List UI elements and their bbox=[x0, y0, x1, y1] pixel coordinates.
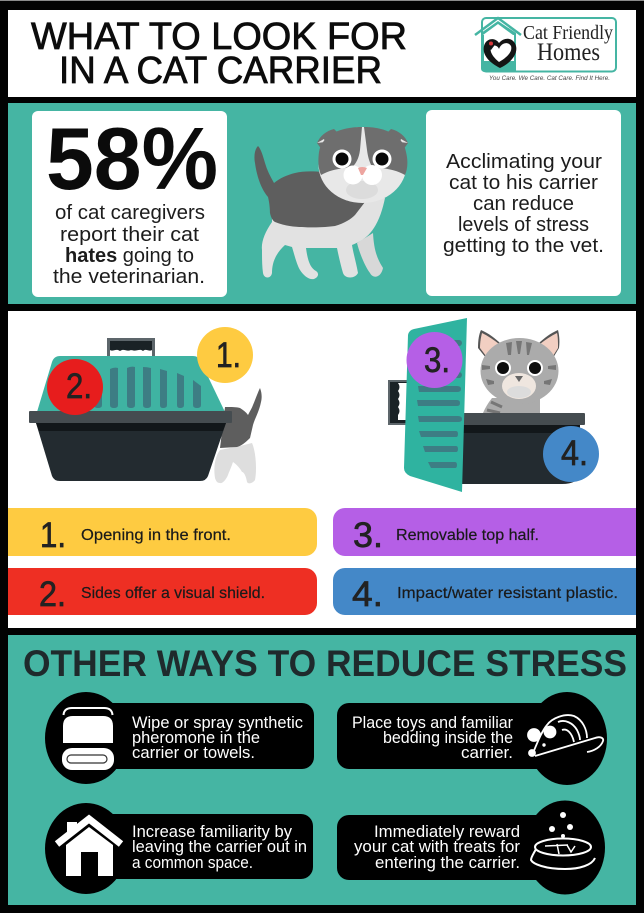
tip: treats: Immediately reward bbox=[374, 822, 520, 841]
feature 4 bbox=[333, 568, 636, 615]
card: 58 percent statistic bbox=[32, 109, 227, 297]
panel: carrier features bbox=[8, 311, 636, 628]
icon: towels bbox=[62, 708, 114, 770]
illustration: scottish fold cat bbox=[254, 127, 408, 279]
badge 3 bbox=[406, 332, 462, 388]
card: acclimating text: Acclimating your bbox=[446, 151, 602, 173]
title: IN A CAT CARRIER bbox=[59, 50, 382, 92]
badge 2: 2. bbox=[66, 367, 92, 406]
heading: OTHER WAYS TO REDUCE STRESS bbox=[23, 643, 627, 684]
carrier base bbox=[462, 425, 580, 484]
card: acclimating text bbox=[426, 110, 621, 296]
tip: familiarity: Increase familiarity by bbox=[132, 822, 292, 841]
logo: Cat Friendly Homes: You Care. We Care. Cat Care. Find It Here. bbox=[489, 76, 610, 82]
icon: toy mouse bbox=[528, 715, 603, 756]
feature 1: 1. bbox=[40, 516, 66, 555]
title: WHAT TO LOOK FOR bbox=[31, 16, 407, 58]
tip: pheromone: Wipe or spray synthetic bbox=[132, 713, 303, 732]
feature 4: Impact/water resistant plastic. bbox=[397, 585, 618, 602]
feature 2: 2. bbox=[39, 575, 66, 614]
tip: pheromone: carrier or towels. bbox=[132, 743, 255, 762]
feature 3: Removable top half. bbox=[396, 527, 539, 544]
badge 2 bbox=[47, 359, 103, 415]
tip: treats: entering the carrier. bbox=[375, 853, 520, 872]
tip: toys and bedding: Place toys and familiar bbox=[352, 713, 513, 732]
feature 3: 3. bbox=[353, 516, 383, 555]
tip: toys and bedding bbox=[337, 692, 607, 785]
feature 1 bbox=[8, 508, 317, 556]
card: 58 percent statistic: 58% bbox=[46, 109, 218, 208]
cat ears bbox=[317, 129, 340, 150]
card: 58 percent statistic: hates going to bbox=[65, 245, 194, 267]
cat behind carrier bbox=[214, 388, 262, 483]
logo: Cat Friendly Homes: Cat Friendly bbox=[523, 22, 613, 44]
tip: toys and bedding: carrier. bbox=[461, 743, 513, 762]
cat legs and lower body bbox=[262, 190, 385, 279]
card: acclimating text: can reduce bbox=[473, 193, 574, 215]
carrier rim and base bbox=[36, 423, 226, 481]
cat head bbox=[318, 127, 407, 203]
cat tail and back bbox=[254, 146, 365, 227]
icon: house bbox=[57, 819, 121, 876]
illustration: carrier with removable top and kitten bbox=[388, 318, 585, 492]
tip: pheromone bbox=[45, 692, 314, 784]
badge 1 bbox=[197, 327, 253, 383]
card: acclimating text: levels of stress bbox=[458, 214, 589, 236]
icon: treat bowl bbox=[531, 812, 595, 869]
card: 58 percent statistic: the veterinarian. bbox=[53, 266, 205, 288]
tip: treats: your cat with treats for bbox=[354, 837, 520, 856]
kitten bbox=[478, 330, 559, 413]
card: acclimating text: getting to the vet. bbox=[443, 235, 604, 257]
tip: pheromone: pheromone in the bbox=[132, 728, 260, 747]
tip: familiarity: a common space. bbox=[132, 853, 253, 872]
card: acclimating text: cat to his carrier bbox=[449, 172, 598, 194]
tip: toys and bedding: bedding inside the bbox=[383, 728, 513, 747]
panel: other ways to reduce stress bbox=[8, 635, 636, 905]
feature 3 bbox=[333, 508, 636, 556]
panel: statistics bbox=[8, 103, 636, 304]
badge 4 bbox=[543, 426, 599, 482]
card: 58 percent statistic: report their cat bbox=[60, 224, 199, 246]
feature 1: Opening in the front. bbox=[81, 527, 231, 544]
panel: header bbox=[8, 10, 636, 97]
card: 58 percent statistic: of cat caregivers bbox=[55, 202, 205, 224]
logo: Cat Friendly Homes: Homes bbox=[537, 39, 600, 66]
carrier door handle bbox=[388, 380, 408, 425]
tip: familiarity bbox=[45, 803, 313, 894]
tip: familiarity: leaving the carrier out in bbox=[132, 837, 307, 856]
carrier top half bbox=[404, 318, 467, 492]
illustration: front-opening carrier with cat bbox=[29, 338, 262, 483]
title bbox=[31, 16, 407, 92]
tip: treats bbox=[337, 800, 605, 894]
carrier lid bbox=[37, 356, 225, 412]
logo: Cat Friendly Homes bbox=[475, 18, 616, 82]
feature 4: 4. bbox=[352, 575, 383, 614]
carrier handle bbox=[107, 338, 155, 357]
badge 3: 3. bbox=[424, 341, 450, 380]
feature 2 bbox=[8, 568, 317, 615]
badge 4: 4. bbox=[561, 434, 588, 473]
feature 2: Sides offer a visual shield. bbox=[81, 585, 265, 602]
badge 1: 1. bbox=[216, 336, 241, 375]
